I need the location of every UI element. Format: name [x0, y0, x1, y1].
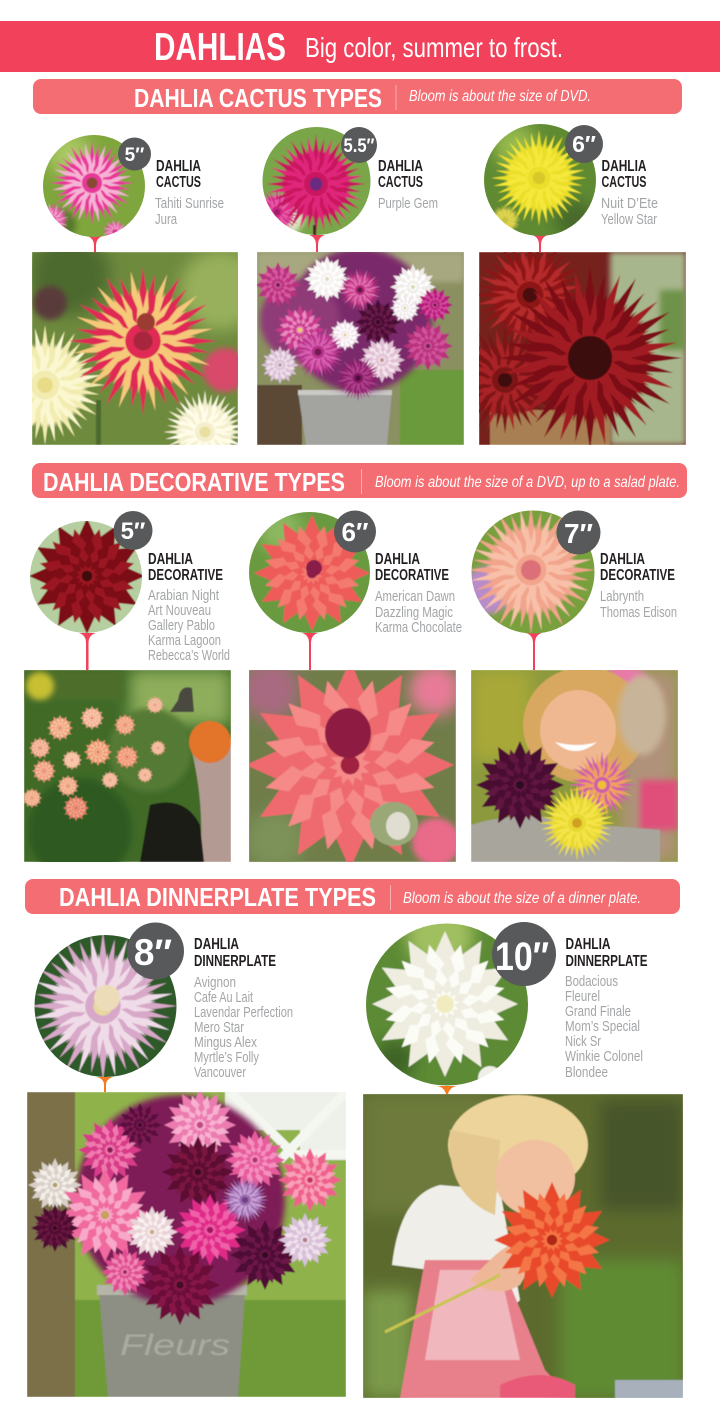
label: CACTUS — [378, 174, 423, 191]
label: Avignon — [194, 974, 236, 991]
size badge — [565, 125, 603, 163]
panel: decorative 7 inch — [471, 510, 678, 862]
size badge: 8″ — [134, 932, 172, 973]
photo: garden border with pumpkin — [24, 670, 231, 862]
label: Tahiti Sunrise — [155, 195, 224, 212]
label — [155, 158, 224, 228]
flower circle: Cafe Au Lait — [34, 935, 176, 1077]
label: Nick Sr — [565, 1033, 601, 1050]
label: DECORATIVE — [375, 567, 449, 584]
label: Jura — [155, 211, 177, 228]
size badge — [127, 922, 184, 980]
photo: coral decorative dahlia — [249, 670, 456, 862]
flower circle: American Dawn — [249, 512, 370, 633]
label: Mingus Alex — [194, 1034, 257, 1051]
section heading: dinnerplate types: DAHLIA DINNERPLATE TYPES — [59, 882, 376, 912]
size badge: 7″ — [564, 518, 593, 549]
label — [375, 551, 462, 636]
size badge — [118, 138, 151, 170]
size badge: 5.5″ — [344, 136, 374, 157]
size badge — [114, 511, 152, 550]
label: Vancouver — [194, 1064, 246, 1081]
label: Blondee — [565, 1064, 608, 1081]
label: Bodacious — [565, 973, 618, 990]
size badge: 5″ — [121, 518, 146, 545]
label: Arabian Night — [148, 587, 220, 604]
connector — [87, 236, 103, 252]
connector — [302, 633, 318, 670]
label: DAHLIA — [600, 551, 645, 568]
label: CACTUS — [156, 174, 201, 191]
label: Nuit D’Ete — [601, 195, 658, 212]
label: DAHLIA — [566, 936, 610, 953]
label: DAHLIA — [375, 551, 420, 568]
label — [600, 551, 677, 621]
photo: red and yellow cactus dahlia — [32, 252, 238, 445]
tagline: Big color, summer to frost. — [305, 32, 563, 63]
size badge — [556, 510, 600, 554]
section heading: dinnerplate types: Bloom is about the size of a dinner plate. — [403, 890, 641, 907]
size badge: 6″ — [572, 131, 596, 157]
label: Thomas Edison — [600, 604, 677, 621]
label: Mero Star — [194, 1019, 244, 1036]
flower circle: Tahiti Sunrise — [43, 135, 145, 237]
label: Myrtle’s Folly — [194, 1049, 259, 1066]
label: DINNERPLATE — [566, 953, 648, 970]
connector — [526, 633, 542, 670]
label — [378, 158, 438, 212]
connector — [79, 633, 96, 670]
photo: child with dahlias — [471, 665, 678, 870]
label: Lavendar Perfection — [194, 1004, 293, 1021]
label: DECORATIVE — [148, 567, 223, 584]
section heading: dinnerplate types — [25, 879, 680, 914]
section heading: cactus types: DAHLIA CACTUS TYPES — [134, 83, 382, 113]
label: Labrynth — [600, 588, 644, 605]
section heading: decorative types: DAHLIA DECORATIVE TYPES — [43, 467, 345, 497]
section heading: cactus types: Bloom is about the size of DVD. — [409, 88, 591, 105]
label: Karma Lagoon — [148, 632, 221, 649]
label — [148, 551, 230, 664]
photo: bouquet in metal bucket: Fleurs — [120, 1329, 230, 1362]
label: American Dawn — [375, 588, 455, 605]
flower circle: Purple Gem — [262, 127, 370, 235]
label: CACTUS — [602, 174, 646, 191]
label: Karma Chocolate — [375, 619, 462, 636]
connector — [309, 235, 325, 252]
label: Mom’s Special — [565, 1018, 640, 1035]
panel: decorative 6 inch — [240, 508, 462, 872]
size badge — [492, 922, 556, 986]
panel: dinnerplate 10 inch — [362, 901, 683, 1398]
panel: cactus 5 inch — [32, 135, 238, 445]
label — [601, 158, 658, 228]
connector — [437, 1086, 457, 1094]
panel: cactus 6 inch — [479, 124, 686, 445]
panel: cactus 5.5 inch — [247, 122, 464, 445]
flower circle: Labrynth — [472, 510, 594, 634]
photo: girl with red dahlia — [363, 1094, 683, 1398]
title banner — [0, 21, 720, 72]
photo: dark red cactus dahlias — [479, 252, 686, 445]
size badge: 10″ — [495, 935, 549, 979]
flower circle: white dinnerplate — [366, 924, 528, 1086]
label: DAHLIA — [602, 158, 646, 175]
label: Dazzling Magic — [375, 604, 453, 621]
photo: bouquet in metal bucket — [27, 1088, 346, 1397]
panel: decorative 5 inch — [22, 511, 231, 882]
flower circle: Arabian Night — [30, 521, 142, 633]
label: DAHLIA — [156, 158, 201, 175]
size badge: 6″ — [342, 517, 368, 547]
label: Grand Finale — [565, 1003, 631, 1020]
photo: bouquet in bucket — [254, 248, 464, 445]
label: Purple Gem — [378, 195, 438, 212]
connector — [532, 235, 548, 252]
size badge: 5″ — [125, 145, 144, 166]
label: Art Nouveau — [148, 602, 211, 619]
section heading: cactus types — [33, 79, 682, 114]
flower circle: Yellow Star — [484, 124, 596, 236]
label: DAHLIA — [148, 551, 193, 568]
connector — [97, 1077, 113, 1092]
size badge — [341, 127, 377, 163]
section heading: decorative types — [32, 463, 687, 498]
title: DAHLIAS — [154, 26, 286, 69]
panel: dinnerplate 8 inch — [12, 915, 346, 1397]
label: Fleurel — [565, 988, 600, 1005]
label: Yellow Star — [601, 211, 657, 228]
label — [194, 936, 293, 1081]
label: Rebecca’s World — [148, 647, 230, 664]
label: Cafe Au Lait — [194, 989, 254, 1006]
label: DECORATIVE — [600, 567, 675, 584]
label: DINNERPLATE — [194, 953, 276, 970]
label: Gallery Pablo — [148, 617, 215, 634]
label: DAHLIA — [194, 936, 239, 953]
label — [565, 936, 648, 1081]
label: DAHLIA — [378, 158, 423, 175]
size badge — [334, 510, 376, 552]
label: Winkie Colonel — [565, 1048, 643, 1065]
